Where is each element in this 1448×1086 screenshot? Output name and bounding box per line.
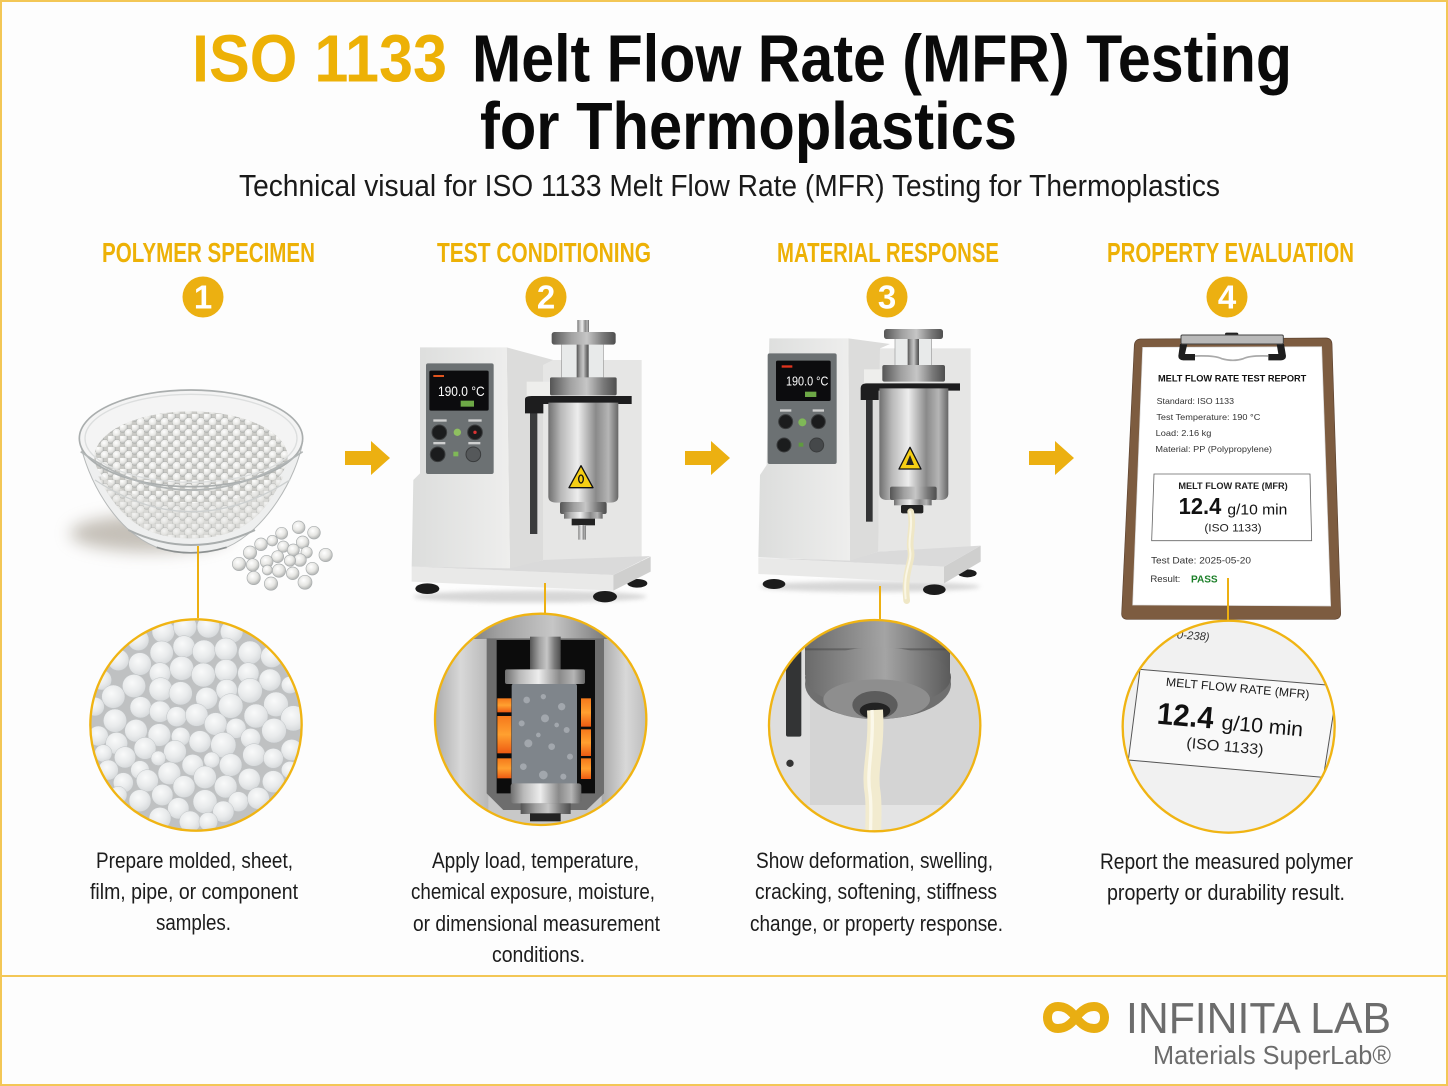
step badge 1: 1	[194, 278, 212, 316]
caption 2: Apply load, temperature,	[432, 848, 639, 873]
lens: pellet close-up	[86, 615, 306, 832]
connector line 3	[879, 586, 881, 619]
caption 2: conditions.	[492, 942, 585, 967]
step heading: material response: MATERIAL RESPONSE	[777, 237, 999, 268]
illustration: melt flow tester extruding: 190.0 °C	[786, 375, 828, 389]
illustration: clipboard test report: (ISO 1133)	[1204, 523, 1262, 535]
arrow 1 to 2	[345, 441, 390, 475]
step heading: polymer specimen: POLYMER SPECIMEN	[102, 237, 315, 268]
illustration: clipboard test report: Test Temperature: 190 °C	[1156, 412, 1260, 422]
step badge 3	[866, 276, 908, 318]
logo: Infinita Lab: Materials SuperLab®	[1153, 1040, 1391, 1070]
lens: report magnified	[1123, 621, 1335, 833]
illustration: melt flow tester extruding	[758, 329, 981, 601]
illustration: clipboard test report: PASS	[1191, 574, 1218, 585]
illustration: clipboard test report: Result:	[1150, 574, 1180, 584]
lens: report magnified: MELT FLOW RATE (MFR)	[1165, 675, 1310, 701]
caption 4: Report the measured polymer	[1100, 849, 1353, 874]
lens: heated barrel cross-section	[433, 612, 650, 828]
caption 1	[90, 848, 298, 935]
caption 1: film, pipe, or component	[90, 879, 298, 904]
connector line 4	[1227, 578, 1229, 620]
caption 4	[1100, 849, 1353, 905]
title: ISO 1133	[192, 22, 447, 96]
caption 1: Prepare molded, sheet,	[96, 848, 293, 873]
illustration: melt flow tester idle	[412, 320, 651, 603]
illustration: clipboard test report: Test Date: 2025-05-20	[1151, 555, 1251, 565]
illustration: clipboard test report: Material: PP (Polypropylene)	[1155, 444, 1272, 454]
illustration: clipboard test report: MELT FLOW RATE TEST REPORT	[1158, 374, 1307, 384]
footer divider	[0, 975, 1448, 977]
illustration: clipboard test report: g/10 min	[1227, 502, 1287, 518]
title	[192, 22, 1292, 164]
illustration: clipboard test report	[1122, 333, 1341, 619]
caption 3: cracking, softening, stiffness	[755, 879, 997, 904]
illustration: clipboard test report: MELT FLOW RATE (MFR)	[1178, 481, 1288, 491]
step badge 1	[182, 276, 224, 318]
caption 4: property or durability result.	[1107, 880, 1345, 905]
logo: Infinita Lab	[1048, 994, 1391, 1070]
arrow 3 to 4	[1029, 441, 1074, 475]
subtitle: Technical visual for ISO 1133 Melt Flow Rate (MFR) Testing for Thermoplastics	[239, 168, 1220, 203]
caption 3: Show deformation, swelling,	[756, 848, 993, 873]
lens: report magnified: 0-238)	[1176, 629, 1210, 644]
step badge 4	[1206, 276, 1248, 318]
step badge 2	[526, 276, 566, 318]
logo: Infinita Lab: INFINITA LAB	[1126, 994, 1391, 1043]
lens: report magnified: g/10 min	[1221, 711, 1304, 741]
title: Melt Flow Rate (MFR) Testing	[472, 22, 1292, 96]
illustration: clipboard test report: Load: 2.16 kg	[1156, 428, 1212, 438]
lens: extrudate at die	[767, 615, 980, 840]
caption 3: change, or property response.	[750, 911, 1003, 936]
caption 1: samples.	[156, 910, 231, 935]
connector line 1	[197, 546, 199, 618]
step heading: property evaluation: PROPERTY EVALUATION	[1107, 237, 1354, 268]
title: for Thermoplastics	[480, 89, 1017, 164]
illustration: bowl of polymer pellets	[70, 390, 332, 590]
caption 2: chemical exposure, moisture,	[411, 879, 655, 904]
step badge 2: 2	[537, 278, 555, 316]
step badge 4: 4	[1218, 278, 1237, 316]
connector line 2	[544, 583, 546, 616]
step heading: test conditioning: TEST CONDITIONING	[437, 237, 651, 268]
arrow 2 to 3	[685, 441, 730, 475]
illustration: melt flow tester idle: 190.0 °C	[438, 383, 485, 399]
lens: report magnified: (ISO 1133)	[1186, 735, 1264, 759]
step badge 3: 3	[878, 278, 896, 316]
illustration: clipboard test report: Standard: ISO 1133	[1157, 396, 1234, 406]
lens: report magnified: 12.4	[1156, 697, 1215, 735]
caption 2: or dimensional measurement	[413, 911, 660, 936]
caption 2	[411, 848, 660, 967]
caption 3	[750, 848, 1003, 936]
illustration: clipboard test report: 12.4	[1179, 493, 1222, 519]
